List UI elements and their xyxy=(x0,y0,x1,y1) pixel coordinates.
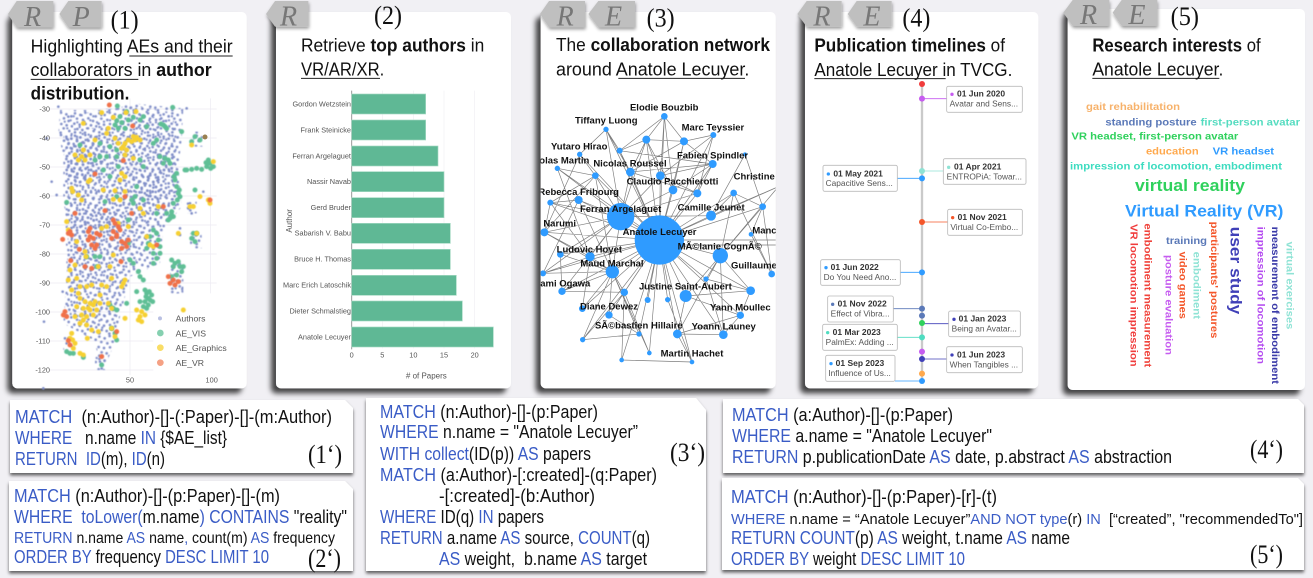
heading: distribution. xyxy=(31,82,129,103)
query box (2'): WHERE toLower(m.name) CONTAINS "reality" xyxy=(14,507,347,527)
event: 01 Jun 2023: When Tangibles ... xyxy=(950,360,1018,370)
tag: P: P xyxy=(72,2,90,33)
node labels: Manc xyxy=(752,225,777,236)
heading xyxy=(301,35,484,80)
tag: R xyxy=(1063,0,1109,31)
node labels: Fabien Spindler xyxy=(677,151,748,162)
event: 01 Jan 2023: Being an Avatar... xyxy=(952,324,1017,334)
node labels: Yoann Launey xyxy=(692,322,757,333)
query box (5'): MATCH (n:Author)-[]-(p:Paper)-[r]-(t) xyxy=(731,487,997,507)
node labels xyxy=(540,104,776,356)
tag: E xyxy=(588,1,635,32)
query box (5'): WHERE n.name = “Anatole Lecuyer”AND NOT type(r) IN [“created”, "recommendedTo"] xyxy=(731,511,1303,528)
event: 01 Mar 2023: PalmEx: Adding ... xyxy=(826,337,894,347)
heading xyxy=(556,34,771,80)
author labels xyxy=(283,99,352,341)
axis ticks xyxy=(350,350,479,359)
word cloud: user study xyxy=(1227,227,1244,315)
event: 01 May 2021: Capacitive Sens... xyxy=(826,178,893,188)
tag: R: R xyxy=(1079,0,1097,31)
heading xyxy=(31,35,233,103)
word cloud: measurement of embodiment xyxy=(1269,227,1280,385)
event: 01 Apr 2021 xyxy=(943,159,1026,184)
network graph xyxy=(540,104,776,364)
author labels: Dieter Schmalstieg xyxy=(289,306,351,315)
axis ticks: 15 xyxy=(440,350,448,359)
author labels: Gordon Wetzstein xyxy=(292,99,351,108)
legend: Authors xyxy=(176,314,206,324)
y axis labels: -120 xyxy=(35,366,50,375)
x axis labels: 50 xyxy=(126,376,134,385)
panel number (1): (1) xyxy=(111,4,139,34)
query box (3'): MATCH (a:Author)-[:created]-(q:Paper) xyxy=(380,465,657,485)
axis ticks: 10 xyxy=(409,350,417,359)
AE_VIS points xyxy=(67,106,213,365)
word cloud: Virtual Reality (VR) xyxy=(1125,202,1283,221)
tag: E: E xyxy=(1127,0,1145,31)
node labels: Diane Dewez xyxy=(580,302,638,313)
word cloud xyxy=(1070,102,1300,385)
y axis labels: -30 xyxy=(39,105,50,114)
node labels: Rebecca Fribourg xyxy=(538,187,619,198)
x axis title: # of Papers xyxy=(406,371,447,380)
event: 01 Jan 2023: 01 Jan 2023 xyxy=(959,314,1007,324)
node labels: Nicolas Martin xyxy=(525,155,590,166)
node labels: Ludovic Hoyet xyxy=(557,245,623,256)
query box (3'): -[:created]-(b:Author) xyxy=(439,486,595,506)
panel 3: collaboration network xyxy=(514,1,778,388)
axis ticks: 20 xyxy=(471,350,479,359)
heading: around Anatole Lecuyer. xyxy=(556,59,749,80)
query box (5'): RETURN COUNT(p) AS weight, t.name AS name xyxy=(731,528,1070,548)
query box (2'): (2‘) xyxy=(308,544,341,573)
heading: Retrieve top authors in xyxy=(301,35,484,56)
legend: AE_Graphics xyxy=(176,343,227,353)
panel 5: research interests xyxy=(1063,0,1305,390)
word cloud: virtual exercises xyxy=(1283,242,1294,330)
node labels: Camille Jeunet xyxy=(678,203,745,214)
heading xyxy=(1092,35,1261,80)
query box (4'): WHERE a.name = "Anatole Lecuyer" xyxy=(732,426,992,446)
author labels: Gerd Bruder xyxy=(311,203,352,212)
node labels: MÃ©lanie CognÃ© xyxy=(678,241,762,252)
query box (1'): RETURN ID(m), ID(n) xyxy=(15,449,165,469)
node labels: Martin Hachet xyxy=(661,349,724,360)
query box (1'): (1‘) xyxy=(308,440,342,469)
word cloud: gait rehabilitation xyxy=(1086,102,1180,113)
nodes xyxy=(540,113,775,364)
query box (1'): MATCH (n:Author)-[]-(:Paper)-[]-(m:Author) xyxy=(15,407,332,427)
tag: E: E xyxy=(862,1,880,32)
query box (3'): WHERE n.name = "Anatole Lecuyer” xyxy=(380,422,638,442)
word cloud: impression of locomotion, embodiment xyxy=(1070,162,1283,173)
author labels: Bruce H. Thomas xyxy=(294,255,351,264)
bar chart xyxy=(283,91,493,380)
author labels: Sabarish V. Babu xyxy=(295,229,351,238)
word cloud: VR headset xyxy=(1213,147,1275,158)
event: 01 Jun 2022 xyxy=(821,260,900,285)
node labels: Maud Marchal xyxy=(580,259,644,270)
y axis labels: -60 xyxy=(39,192,50,201)
word cloud: video games xyxy=(1176,252,1187,319)
heading xyxy=(814,35,1012,80)
y axis labels: -90 xyxy=(39,279,50,288)
query box (5'): ORDER BY weight DESC LIMIT 10 xyxy=(731,549,965,569)
event: 01 Sep 2023: 01 Sep 2023 xyxy=(836,358,885,368)
query box (1'): WHERE n.name IN {$AE_list} xyxy=(15,428,227,449)
legend xyxy=(157,314,227,368)
event: 01 Jun 2020: Avatar and Sens... xyxy=(950,99,1018,109)
connectors xyxy=(893,99,949,381)
tag: R: R xyxy=(23,2,41,33)
tag: R xyxy=(540,1,585,32)
heading: The collaboration network xyxy=(556,34,771,55)
event: 01 Sep 2023: Influence of Us... xyxy=(828,368,891,378)
word cloud: VR locomotion impression xyxy=(1128,224,1139,367)
event: 01 Apr 2021: 01 Apr 2021 xyxy=(954,161,1002,171)
panel number (4): (4) xyxy=(902,3,930,33)
event: 01 Mar 2023 xyxy=(823,324,897,350)
word cloud: education xyxy=(1146,147,1199,158)
word cloud: first-person avatar xyxy=(1201,117,1300,128)
y axis labels: -50 xyxy=(39,163,50,172)
tag: R xyxy=(266,1,308,32)
event: 01 Jun 2022: Do You Need Ano... xyxy=(824,272,896,282)
word cloud: virtual reality xyxy=(1135,176,1246,195)
node labels: SÃ©bastien Hillaire xyxy=(595,321,683,332)
node labels: Guillaume xyxy=(731,261,777,272)
panel number (2): (2) xyxy=(374,0,402,30)
timeline xyxy=(821,81,1026,384)
word cloud: VR headset, first-person avatar xyxy=(1071,132,1238,143)
query box (3'): WITH collect(ID(p)) AS papers xyxy=(380,444,591,464)
axis ticks: 5 xyxy=(380,350,384,359)
legend: AE_VR xyxy=(176,358,204,368)
word cloud: embodiment xyxy=(1191,252,1202,320)
event: 01 Apr 2021: ENTROPiA: Towar... xyxy=(947,171,1022,181)
query box (3'): MATCH (n:Author)-[]-(p:Paper) xyxy=(380,402,598,422)
heading: Anatole Lecuyer in TVCG. xyxy=(814,59,1012,80)
event: 01 Jun 2023: 01 Jun 2023 xyxy=(957,349,1005,359)
event: 01 Jun 2023 xyxy=(947,347,1022,373)
x axis labels: 100 xyxy=(206,376,218,385)
query box (4'): (4‘) xyxy=(1250,435,1283,464)
query box (1') xyxy=(10,400,353,473)
word cloud: participants' postures xyxy=(1208,222,1219,339)
node labels: Elodie Bouzbib xyxy=(630,103,699,114)
event: 01 Jun 2022: 01 Jun 2022 xyxy=(831,262,879,272)
author labels: Anatole Lecuyer xyxy=(298,332,352,341)
word cloud: training xyxy=(1166,236,1207,247)
query box (2'): RETURN n.name AS name, count(m) AS frequency xyxy=(14,530,335,547)
panel number (5): (5) xyxy=(1171,1,1199,31)
word cloud: impression of locomotion xyxy=(1255,227,1266,364)
tag: E: E xyxy=(604,1,622,32)
event: 01 Nov 2021: 01 Nov 2021 xyxy=(958,212,1007,222)
query box (3'): AS weight, b.name AS target xyxy=(439,549,647,569)
event: 01 Nov 2021 xyxy=(948,209,1022,235)
heading: Highlighting AEs and their xyxy=(31,35,233,56)
query box (4'): RETURN p.publicationDate AS date, p.abstract AS abstraction xyxy=(732,447,1172,467)
query box (3'): WHERE ID(q) IN papers xyxy=(380,507,544,527)
heading: Anatole Lecuyer. xyxy=(1092,59,1223,80)
query box (4'): MATCH (a:Author)-[]-(p:Paper) xyxy=(732,405,953,425)
author labels: Marc Erich Latoschik xyxy=(283,281,351,290)
tag: P xyxy=(59,1,102,33)
event: 01 Nov 2022: 01 Nov 2022 xyxy=(838,299,887,309)
panel number (3): (3) xyxy=(647,3,675,33)
node labels: Nami Ogawa xyxy=(533,279,591,290)
y axis labels xyxy=(35,105,50,375)
AE_Graphics points xyxy=(67,112,213,355)
query box (2'): MATCH (n:Author)-[]-(p:Paper)-[]-(m) xyxy=(14,486,280,506)
node labels: Christine xyxy=(734,171,775,182)
node labels: Ferran Argelaguet xyxy=(580,204,662,215)
node labels: Nicolas Roussel xyxy=(593,159,667,170)
node labels: Yann Moullec xyxy=(710,303,771,314)
bars xyxy=(352,94,493,347)
y axis labels: -70 xyxy=(39,221,50,230)
legend: AE_VIS xyxy=(176,329,206,339)
node labels: Tiffany Luong xyxy=(575,116,638,127)
y axis title: Author xyxy=(285,209,294,233)
author labels: Ferran Argelaguet xyxy=(292,151,351,160)
heading: VR/AR/XR. xyxy=(301,59,384,80)
query box (3') xyxy=(366,398,706,571)
event: 01 Jun 2020: 01 Jun 2020 xyxy=(957,89,1005,99)
heading: collaborators in author xyxy=(31,59,212,80)
node labels: Anatole Lecuyer xyxy=(623,227,697,238)
panel 2: top authors xyxy=(266,0,511,388)
tag: R xyxy=(797,1,842,32)
event: 01 May 2021 xyxy=(823,165,897,191)
node labels: Claudio Pacchierotti xyxy=(627,177,718,188)
query box (4') xyxy=(723,399,1304,473)
heading: Research interests of xyxy=(1092,35,1261,56)
node labels: Yutaro Hirao xyxy=(551,142,608,153)
word cloud: embodiment measurement xyxy=(1142,223,1153,368)
AE_VR points xyxy=(63,105,210,357)
edges xyxy=(543,116,778,362)
axis ticks: 0 xyxy=(350,350,354,359)
event: 01 May 2021: 01 May 2021 xyxy=(833,168,883,178)
x axis labels xyxy=(126,376,218,385)
heading: Publication timelines of xyxy=(814,35,1006,56)
query box (2') xyxy=(9,481,353,573)
author labels: Nassir Navab xyxy=(307,177,351,186)
tag: E xyxy=(1113,0,1157,31)
y axis labels: -40 xyxy=(39,134,50,143)
panel 4: publication timeline xyxy=(797,1,1038,388)
query box (5'): (5‘) xyxy=(1250,540,1283,569)
event: 01 Mar 2023: 01 Mar 2023 xyxy=(833,327,881,337)
node labels: Justine Saint-Aubert xyxy=(639,281,733,292)
node labels: Marc Teyssier xyxy=(682,123,745,134)
tag: R: R xyxy=(279,1,297,32)
event: 01 Nov 2021: Virtual Co-Embo... xyxy=(950,222,1018,232)
tag: R: R xyxy=(556,1,574,32)
word cloud: standing posture xyxy=(1105,117,1197,128)
word cloud: posture evaluation xyxy=(1162,255,1173,355)
panel 1: author distribution xyxy=(8,1,247,388)
node labels: Takuji Narumi xyxy=(514,219,576,230)
scatter plot xyxy=(35,98,227,388)
event: 01 Jan 2023 xyxy=(949,311,1020,337)
authors xyxy=(43,103,203,388)
axis nodes xyxy=(919,81,925,384)
event: 01 Jun 2020 xyxy=(947,86,1022,112)
query box (3'): (3‘) xyxy=(670,438,705,467)
event: 01 Nov 2022: Effect of Vibra... xyxy=(831,309,890,319)
query box (2'): ORDER BY frequency DESC LIMIT 10 xyxy=(14,547,269,567)
tag: R: R xyxy=(812,1,830,32)
tag: R xyxy=(8,1,53,33)
author labels: Frank Steinicke xyxy=(300,125,351,134)
query box (5') xyxy=(722,478,1304,570)
y axis labels: -80 xyxy=(39,250,50,259)
y axis labels: -110 xyxy=(36,337,50,346)
query box (3'): RETURN a.name AS source, COUNT(q) xyxy=(380,528,650,548)
tag: E xyxy=(848,1,892,32)
event: 01 Nov 2022 xyxy=(828,296,893,322)
y axis labels: -100 xyxy=(35,308,50,317)
event: 01 Sep 2023 xyxy=(826,355,895,381)
